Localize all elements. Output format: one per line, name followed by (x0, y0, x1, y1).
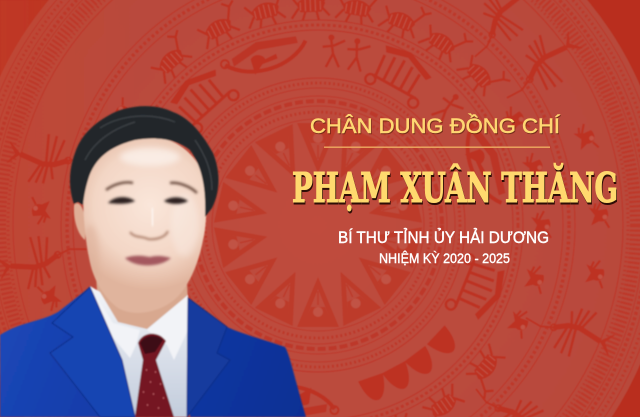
ear (74, 203, 86, 240)
title: chân dung đồng chí: CHÂN DUNG ĐỒNG CHÍ (310, 113, 560, 138)
suit (0, 287, 306, 417)
lapels (50, 287, 135, 417)
position: BÍ THƯ TỈNH ỦY HẢI DƯƠNG (338, 228, 549, 247)
collar (104, 314, 188, 360)
animal band: deer and birds (89, 0, 551, 417)
term: NHIỆM KỲ 2020 - 2025 (379, 251, 510, 266)
face (83, 136, 206, 313)
neck (96, 281, 188, 330)
nose (130, 208, 168, 239)
hair strands (85, 116, 212, 190)
eyes and eyebrows (106, 182, 197, 204)
scene band: boats and houses (170, 34, 506, 416)
shirt (90, 286, 188, 417)
portrait (0, 106, 306, 417)
hair (70, 106, 218, 217)
title: chân dung đồng chí: CHÂN DUNG ĐỒNG CHÍ (311, 114, 561, 139)
divider line (324, 146, 550, 148)
face shading (86, 146, 198, 258)
mouth (125, 256, 171, 266)
central star triangles (214, 123, 422, 327)
necktie (135, 334, 174, 417)
